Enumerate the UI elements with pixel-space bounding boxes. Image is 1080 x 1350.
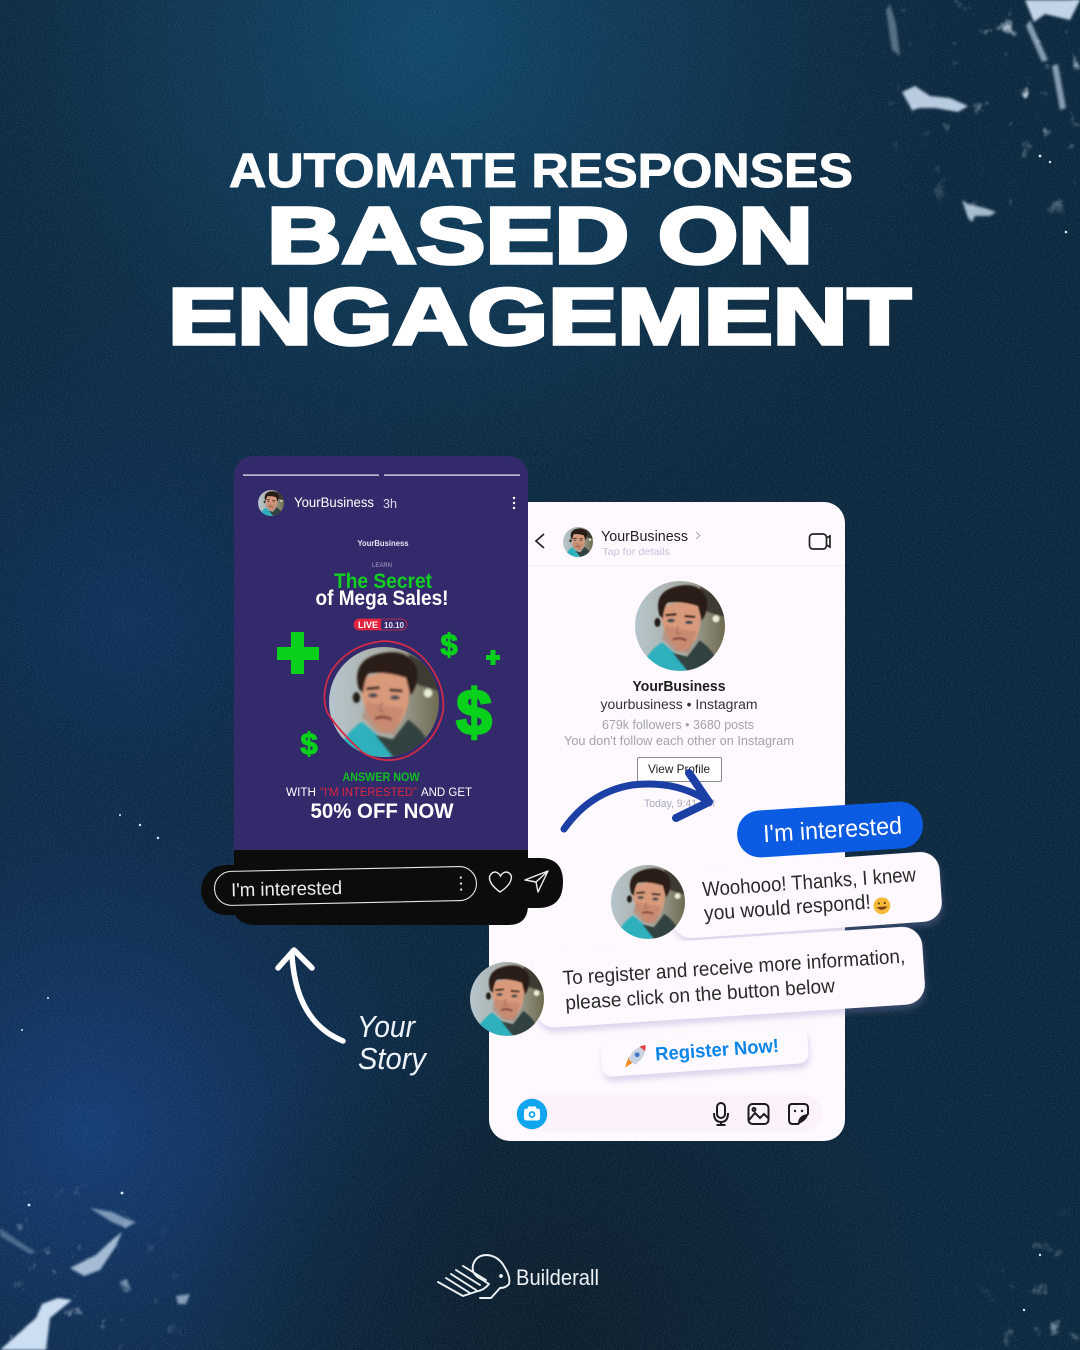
arrow: to reply — [564, 773, 709, 829]
flyer discount: 50% OFF NOW — [310, 800, 454, 823]
panel: instagram story — [201, 456, 563, 925]
icon: heart — [489, 872, 512, 892]
icon: lower dollar: $ — [300, 726, 318, 761]
reply input: I'm interested — [231, 878, 342, 901]
live badge: LIVE — [358, 620, 378, 630]
flyer eyebrow: LEARN — [372, 563, 392, 569]
caption: your story — [357, 1009, 428, 1076]
message input bar — [517, 1095, 822, 1132]
flyer brand: YourBusiness — [358, 538, 409, 548]
icon: story menu — [513, 497, 515, 509]
live badge — [354, 619, 407, 630]
logo wordmark: Builderall — [516, 1265, 599, 1290]
icon: back chevron — [536, 534, 544, 548]
logo mark — [438, 1255, 509, 1298]
icon: video camera — [810, 534, 830, 549]
chat header name: YourBusiness — [601, 529, 688, 545]
icon: image — [748, 1104, 768, 1124]
arrow: to story — [278, 950, 343, 1041]
title line: based on: BASED ON — [267, 191, 813, 280]
chat header chevron — [696, 532, 700, 539]
icon: microphone — [714, 1103, 728, 1125]
bubble: register info: please click on the button below — [565, 975, 836, 1015]
follow note: You don't follow each other on Instagram — [564, 734, 794, 748]
flyer call to action: ANSWER NOW — [342, 770, 420, 784]
flyer offer line: WITH — [286, 787, 316, 799]
profile name: YourBusiness — [632, 679, 726, 695]
bubble: woohooo reply — [669, 851, 943, 939]
flyer offer line: "I'M INTERESTED" — [320, 787, 417, 799]
icon: small plus — [486, 650, 500, 665]
icon: sticker — [789, 1104, 808, 1124]
icon: large plus — [277, 632, 319, 674]
panel: instagram chat — [470, 502, 943, 1141]
chat header subtitle: Tap for details — [602, 546, 670, 558]
profile avatar — [635, 581, 725, 671]
story account name: YourBusiness — [294, 494, 374, 510]
title line: automate responses: AUTOMATE RESPONSES — [229, 145, 853, 198]
profile handle: yourbusiness • Instagram — [600, 696, 758, 712]
bubble: i'm interested — [736, 800, 924, 859]
story reply bar — [201, 850, 563, 925]
reply input — [214, 866, 477, 906]
caption: your story: Story — [358, 1041, 428, 1076]
profile stats: 679k followers • 3680 posts — [602, 718, 754, 732]
caption: your story: Your — [357, 1009, 417, 1044]
button: register now: Register Now! — [654, 1036, 780, 1065]
icon: send — [525, 871, 548, 892]
icon: rocket — [624, 1045, 647, 1068]
avatar: register info — [470, 962, 544, 1036]
story avatar — [258, 490, 284, 516]
story age: 3h — [383, 496, 397, 511]
flyer heading: of Mega Sales! — [316, 587, 448, 610]
bubble: register info — [531, 926, 926, 1029]
title line: engagement: ENGAGEMENT — [168, 272, 911, 361]
chat header divider — [528, 565, 845, 566]
icon: camera button — [517, 1099, 547, 1129]
flyer offer line — [286, 787, 472, 799]
story progress bars — [243, 474, 520, 476]
avatar: woohooo reply — [611, 865, 685, 939]
logo: builderall — [438, 1255, 599, 1298]
flyer heading — [316, 570, 448, 610]
story grain — [234, 456, 528, 850]
icon: top dollar: $ — [440, 627, 458, 662]
bubble: woohooo reply: you would respond! — [703, 891, 871, 925]
flyer heading: The Secret — [334, 570, 432, 593]
timestamp: Today, 9:41 AM — [644, 798, 715, 810]
bubble: register info: To register and receive more information, — [562, 946, 906, 990]
live badge: 10.10 — [384, 621, 405, 630]
icon: smile emoji — [873, 897, 891, 915]
title — [168, 145, 911, 361]
button: register now — [600, 1025, 809, 1077]
bubble: woohooo reply: Woohooo! Thanks, I knew — [702, 863, 917, 901]
chat header avatar — [563, 527, 593, 557]
icon: large dollar: $ — [456, 676, 492, 748]
flyer photo — [324, 641, 443, 760]
flyer offer line: AND GET — [421, 787, 472, 799]
view profile button: View Profile — [648, 762, 710, 776]
bubble: i'm interested: I'm interested — [762, 813, 903, 848]
view profile button — [638, 758, 722, 782]
